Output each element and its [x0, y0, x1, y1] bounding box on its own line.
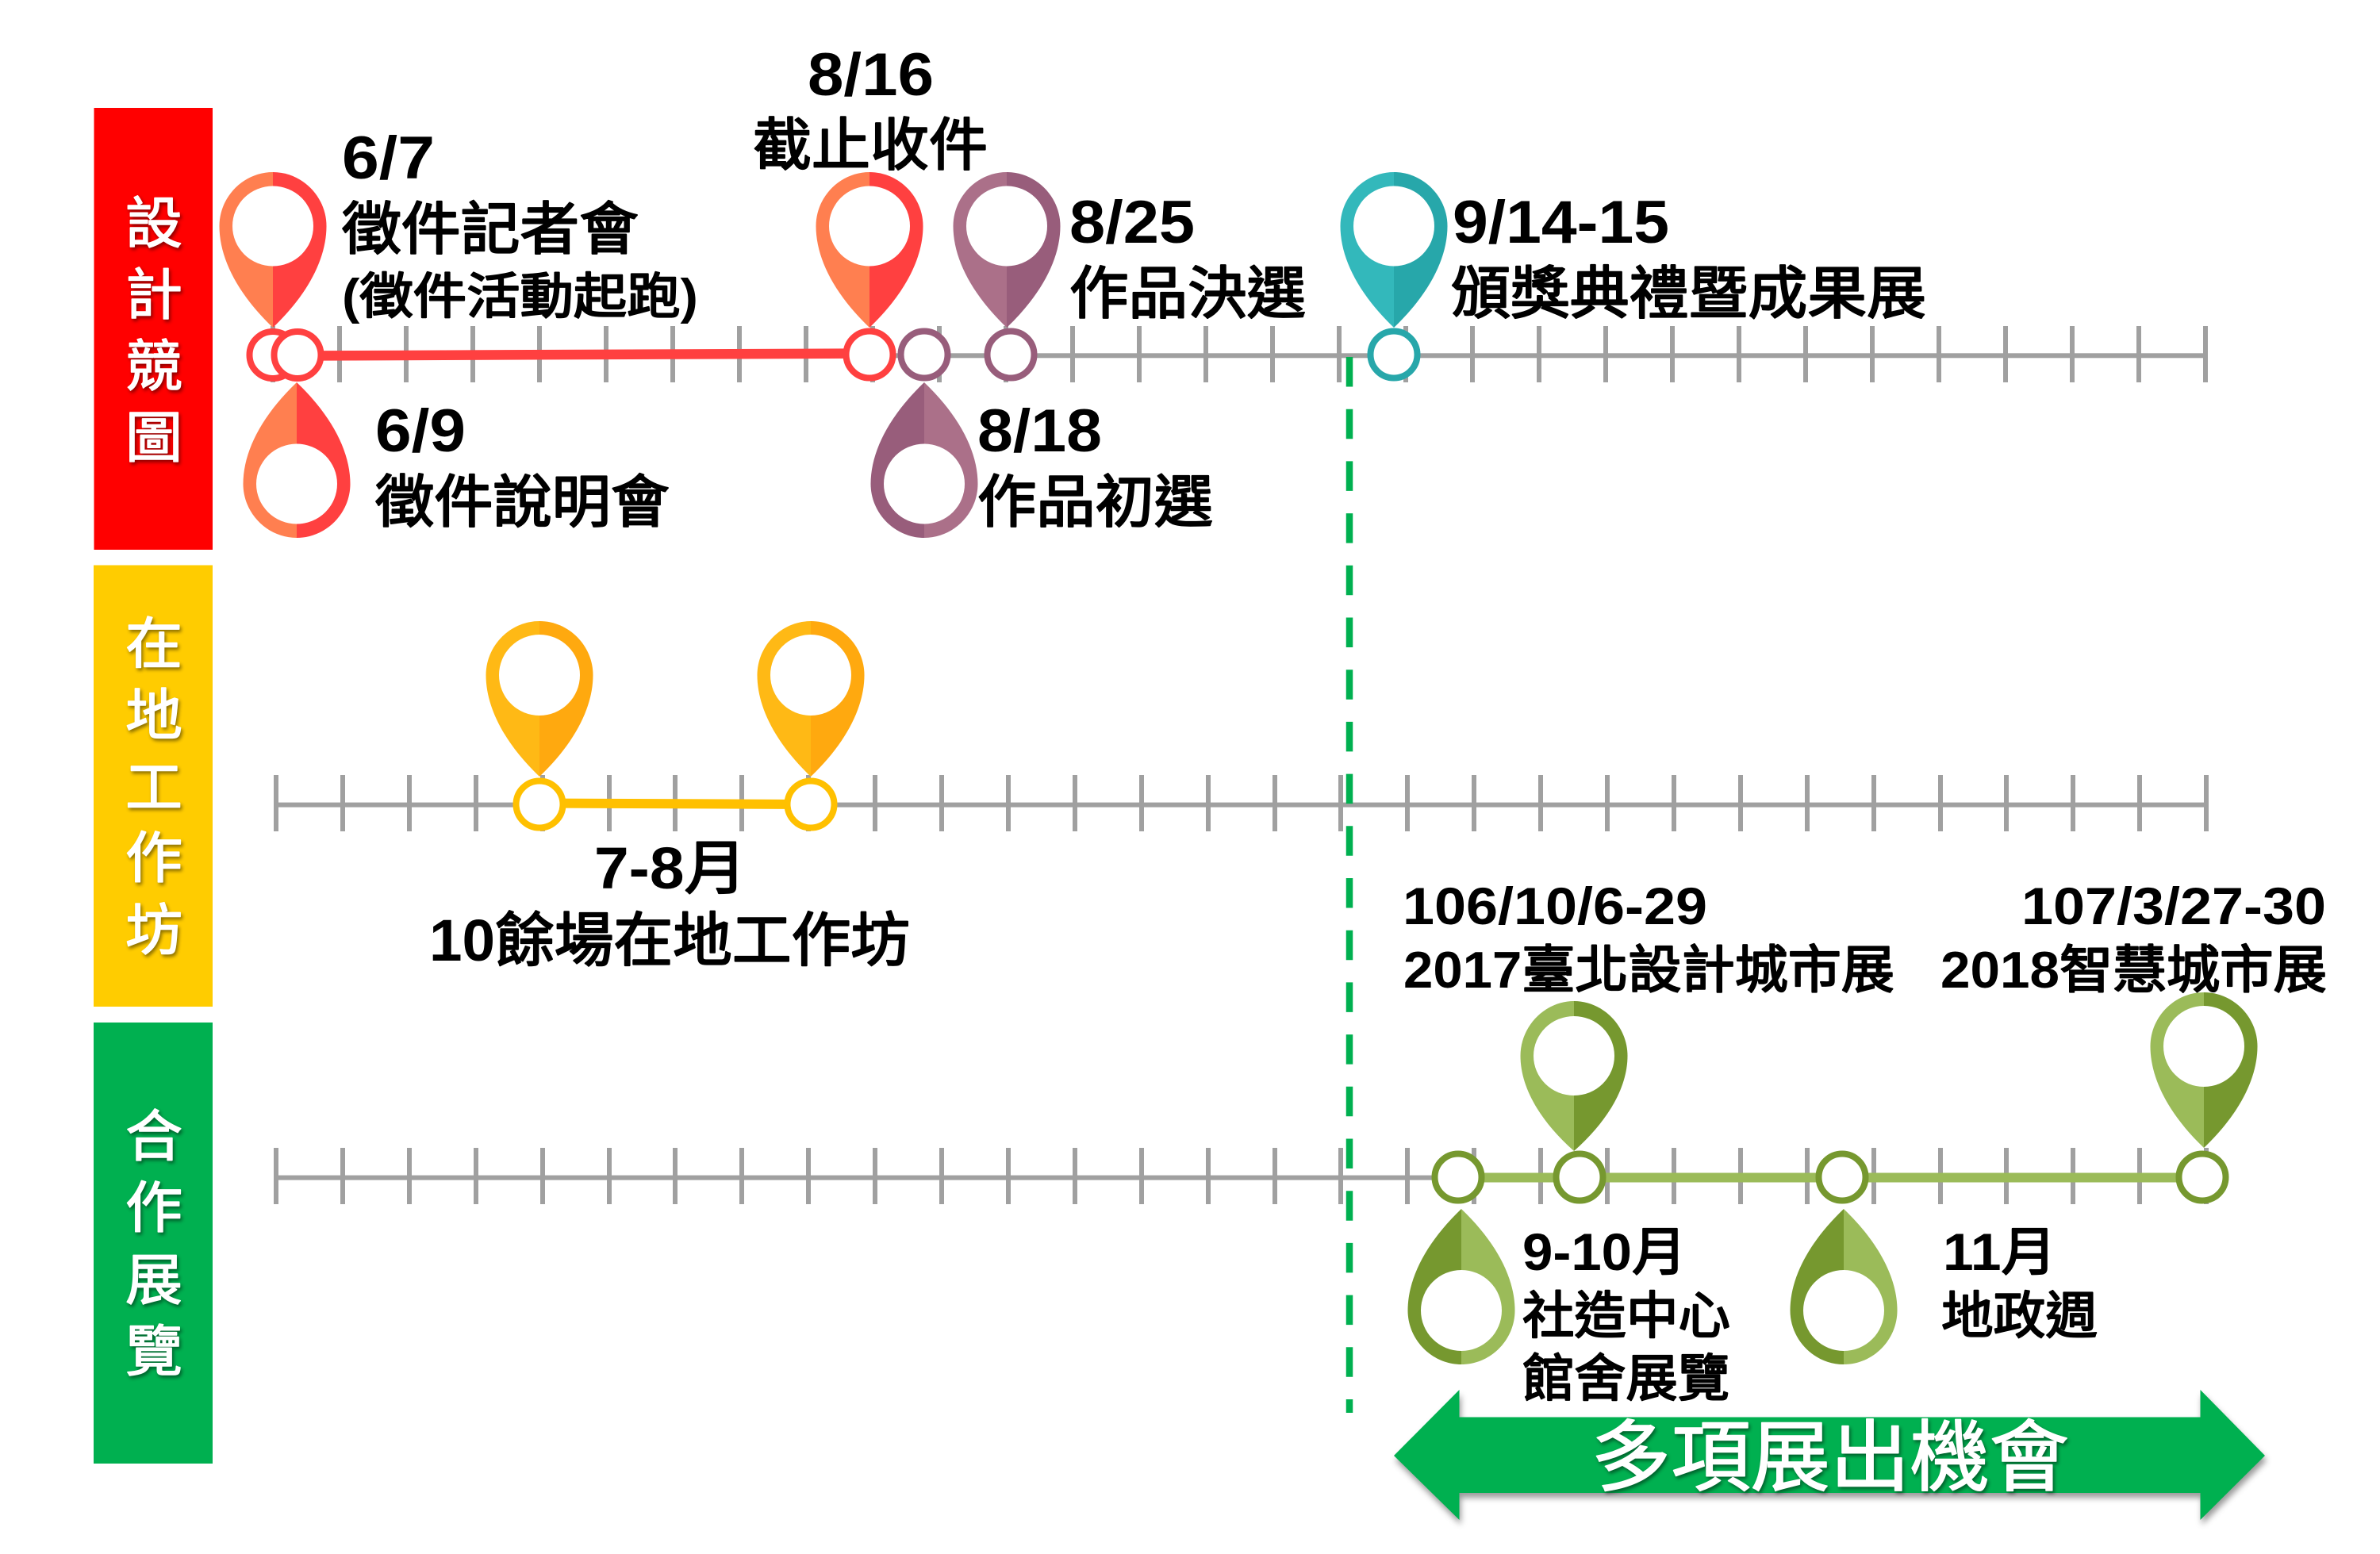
label: 11月 地政週: 11月 — [1943, 1222, 2056, 1281]
heading: 合作展覽: 覽 — [125, 1321, 182, 1383]
progress line: yellow — [539, 803, 811, 804]
heading: 合作展覽 — [125, 1106, 182, 1383]
label: 9-10月 社造中心館舍展覽 — [1522, 1222, 1730, 1407]
heading: 設計競圖: 設 — [125, 193, 182, 255]
label: 6/9 徵件說明會 — [375, 397, 670, 535]
icon: pin 6/7 — [219, 172, 327, 328]
progress line: green — [1458, 1172, 2202, 1182]
label: 6/7 徵件記者會: 徵件記者會 — [342, 198, 639, 262]
timeline: 合作展覽 axis — [276, 1148, 2209, 1204]
arrow label: 多項展出機會 — [1591, 1414, 2069, 1501]
label: 8/25 作品決選: 8/25 — [1069, 189, 1195, 256]
dashed divider — [1346, 357, 1353, 1413]
label: 9/14-15 頒獎典禮暨成果展: 頒獎典禮暨成果展 — [1451, 263, 1926, 326]
label: 106/10/6-29 2017臺北設計城市展 — [1403, 877, 1894, 999]
heading: 合作展覽: 合 — [125, 1106, 182, 1168]
label: 6/7 徵件記者會 — [342, 125, 698, 324]
icon: pin 8/16 — [816, 172, 923, 328]
timeline: 設計競圖 axis — [273, 326, 2208, 382]
heading: 在地工作坊: 工 — [125, 757, 182, 819]
heading: 設計競圖: 競 — [125, 336, 182, 397]
label: 106/10/6-29 2017臺北設計城市展: 106/10/6-29 — [1403, 877, 1707, 935]
heading: 在地工作坊: 在 — [125, 613, 182, 675]
markers: 設計競圖 timeline nodes — [249, 332, 1417, 378]
panel: 設計競圖 category bar — [94, 108, 213, 550]
label: 9-10月 社造中心館舍展覽: 社造中心 — [1522, 1287, 1730, 1345]
heading: 設計競圖: 圖 — [125, 407, 182, 469]
panel: 在地工作坊 category bar — [94, 565, 213, 1007]
heading: 在地工作坊: 坊 — [125, 900, 182, 961]
icon: pin 8/18 — [871, 382, 977, 538]
icon: pin 2017 — [1520, 1001, 1628, 1151]
icon: pin 地政週 — [1790, 1209, 1898, 1364]
heading: 合作展覽: 作 — [125, 1177, 182, 1239]
label: 106/10/6-29 2017臺北設計城市展: 2017臺北設計城市展 — [1403, 941, 1894, 999]
heading: 在地工作坊 — [125, 613, 182, 961]
progress line: red — [298, 354, 869, 355]
label: 8/16 截止收件 — [753, 41, 988, 178]
label: 6/9 徵件說明會: 徵件說明會 — [375, 471, 670, 535]
markers: 合作展覽 timeline nodes — [1434, 1153, 2226, 1201]
icon: pin workshop end — [757, 621, 865, 777]
arrow: 多項展出機會 double-headed arrow — [1394, 1390, 2265, 1520]
label: 8/25 作品決選: 作品決選 — [1069, 263, 1306, 326]
icon: pin 社造中心 — [1407, 1209, 1515, 1364]
icon: pin 6/9 — [243, 382, 351, 538]
label: 6/9 徵件說明會: 6/9 — [375, 397, 466, 465]
timeline: 在地工作坊 axis — [276, 775, 2209, 831]
heading: 設計競圖: 計 — [125, 264, 182, 326]
label: 6/7 徵件記者會: (徵件活動起跑 ) — [342, 270, 698, 324]
markers: 在地工作坊 timeline nodes — [516, 781, 835, 828]
label: 107/3/27-30 2018智慧城市展: 107/3/27-30 — [2021, 877, 2326, 935]
label: 8/25 作品決選 — [1069, 189, 1306, 326]
label: 9/14-15 頒獎典禮暨成果展 — [1451, 189, 1926, 326]
label: 8/18 作品初選 — [977, 397, 1213, 535]
label: 9/14-15 頒獎典禮暨成果展: 9/14-15 — [1453, 189, 1669, 256]
icon: pin workshop start — [486, 621, 593, 777]
label: 7-8月 10餘場在地工作坊 — [429, 835, 910, 973]
label: 7-8月 10餘場在地工作坊: 10餘場在地工作坊 — [429, 907, 910, 973]
icon: pin 9/14-15 — [1341, 172, 1447, 328]
label: 8/16 截止收件: 8/16 — [808, 41, 934, 109]
label: 11月 地政週 — [1941, 1222, 2098, 1345]
heading: 在地工作坊: 作 — [125, 827, 182, 889]
label: 7-8月 10餘場在地工作坊: 7-8月 — [594, 835, 747, 901]
label: 9-10月 社造中心館舍展覽: 9-10月 — [1522, 1222, 1687, 1281]
label: 6/7 徵件記者會: 6/7 — [342, 125, 435, 192]
label: 8/16 截止收件: 截止收件 — [753, 114, 988, 178]
label: 107/3/27-30 2018智慧城市展 — [1940, 877, 2327, 999]
heading: 合作展覽: 展 — [125, 1249, 182, 1311]
icon: pin 8/25 — [954, 172, 1060, 328]
label: 8/18 作品初選: 8/18 — [977, 397, 1102, 465]
panel: 合作展覽 category bar — [94, 1023, 213, 1464]
label: 107/3/27-30 2018智慧城市展: 2018智慧城市展 — [1940, 941, 2327, 999]
icon: pin 2018 — [2150, 992, 2258, 1148]
label: 8/18 作品初選: 作品初選 — [977, 471, 1213, 535]
heading: 設計競圖 — [125, 193, 182, 469]
heading: 在地工作坊: 地 — [125, 685, 182, 746]
label: 11月 地政週: 地政週 — [1941, 1287, 2098, 1345]
label: 9-10月 社造中心館舍展覽: 館舍展覽 — [1522, 1350, 1729, 1407]
